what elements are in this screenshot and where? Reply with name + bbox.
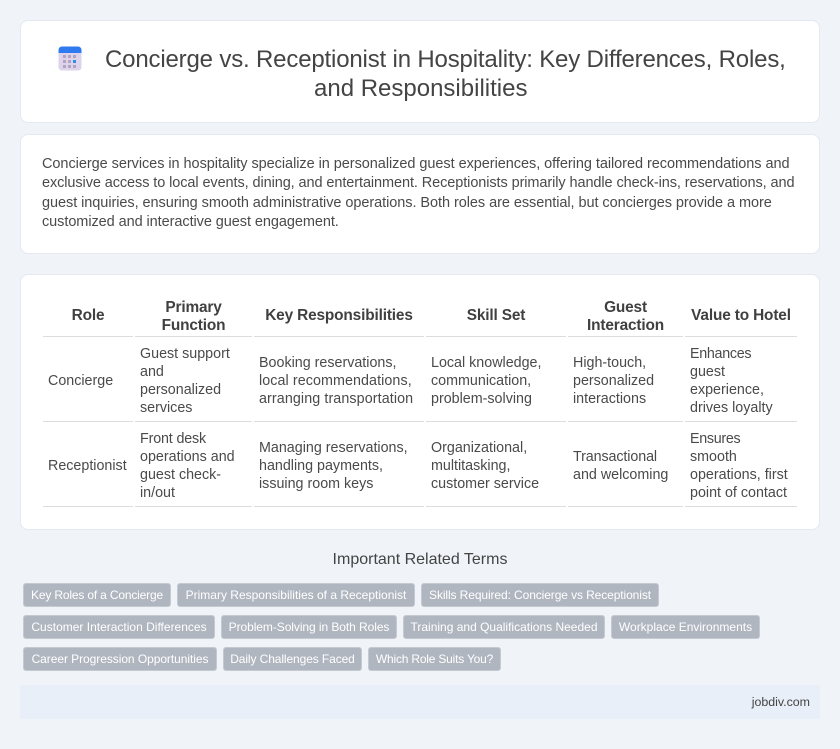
- panel: comparison table: [20, 274, 820, 530]
- table header: Primary Function: [162, 299, 225, 334]
- table header: Guest Interaction: Interaction: [587, 317, 664, 334]
- tag: Primary Responsibilities of a Receptionist: Primary Responsibilities of a Receptionist: [186, 588, 406, 602]
- row: Receptionist responsibilities: [259, 440, 408, 492]
- row: Concierge role: Concierge: [48, 373, 113, 389]
- row: Receptionist skills: Organizational,: [431, 440, 527, 456]
- row: Concierge primary function: and: [140, 364, 164, 380]
- row: Receptionist value: point of contact: [690, 485, 787, 501]
- row: Receptionist role: Receptionist: [48, 458, 127, 474]
- row: Concierge value: experience,: [690, 382, 764, 398]
- row: Receptionist skills: multitasking,: [431, 458, 510, 474]
- row: Receptionist primary function: operations and: [140, 449, 235, 465]
- row: Receptionist primary function: in/out: [140, 485, 175, 501]
- tag: Daily Challenges Faced: Daily Challenges Faced: [230, 652, 355, 666]
- tag: Daily Challenges Faced: [223, 647, 362, 671]
- row: Receptionist value: [690, 431, 788, 501]
- row: Receptionist primary function: [140, 431, 235, 501]
- row: Concierge skills: Local knowledge,: [431, 355, 541, 371]
- tag: Which Role Suits You?: Which Role Suits You?: [376, 652, 493, 666]
- footer credit: jobdiv.com: [752, 695, 810, 709]
- icon: calendar: [58, 46, 82, 70]
- row: Concierge primary function: personalized: [140, 382, 221, 398]
- tag: Problem-Solving in Both Roles: Problem-Solving in Both Roles: [229, 620, 389, 634]
- row: Receptionist skills: customer service: [431, 476, 539, 492]
- row: Concierge guest interaction: High-touch,: [573, 355, 646, 371]
- table header: Skill Set: Skill Set: [467, 307, 525, 324]
- tag: Skills Required: [421, 583, 659, 607]
- row: Concierge primary function: services: [140, 400, 192, 416]
- row: Concierge responsibilities: local recommendations,: [259, 373, 412, 389]
- row: Receptionist value: smooth: [690, 449, 737, 465]
- row: Receptionist skills: [431, 440, 539, 492]
- row: Concierge value: drives loyalty: [690, 400, 773, 416]
- row: Concierge guest interaction: personalized: [573, 373, 654, 389]
- row: Concierge primary function: Guest support: [140, 346, 230, 362]
- row: Receptionist guest interaction: and welcoming: [573, 467, 668, 483]
- header card: [20, 20, 820, 123]
- tag: Workplace Environments: [611, 615, 760, 639]
- row: Receptionist guest interaction: Transactional: [573, 449, 657, 465]
- tag: Primary Responsibilities of a Receptionist: [177, 583, 415, 607]
- row: Receptionist primary function: guest check-: [140, 467, 221, 483]
- tag: Which Role Suits You?: [368, 647, 501, 671]
- tag: Customer Interaction Differences: [23, 615, 215, 639]
- row: Concierge responsibilities: [259, 355, 413, 407]
- title: Concierge vs. Receptionist in Hospitality: Key Differences, Roles,: [105, 46, 786, 73]
- intro text: customized and interactive guest engagement.: [42, 214, 339, 230]
- row: Receptionist responsibilities: Managing reservations,: [259, 440, 408, 456]
- row: Concierge value: Enhances: [690, 346, 751, 362]
- tag: Skills Required: Skills Required: Concierge vs Receptionist: [429, 588, 651, 602]
- tag: Career Progression Opportunities: [23, 647, 217, 671]
- intro text: [42, 156, 794, 230]
- row: Receptionist guest interaction: [573, 449, 668, 483]
- row: Concierge skills: problem-solving: [431, 391, 532, 407]
- row: Concierge responsibilities: arranging transportation: [259, 391, 413, 407]
- row: Concierge skills: communication,: [431, 373, 531, 389]
- tag: Workplace Environments: Workplace Environments: [619, 620, 752, 634]
- row: Concierge primary function: [140, 346, 230, 416]
- table header: Guest Interaction: Guest: [604, 299, 647, 316]
- tag: Customer Interaction Differences: Customer Interaction Differences: [31, 620, 207, 634]
- row: Concierge value: [690, 346, 773, 416]
- table header: Key Responsibilities: Key Responsibilities: [265, 307, 413, 324]
- footer bar: [20, 685, 820, 719]
- tag: Training and Qualifications Needed: [403, 615, 605, 639]
- tag: Key Roles of a Concierge: [23, 583, 171, 607]
- row: Receptionist value: Ensures: [690, 431, 740, 447]
- title: and Responsibilities: [314, 75, 527, 102]
- table header: Role: Role: [72, 307, 104, 324]
- related terms heading: Important Related Terms: [333, 551, 507, 568]
- title: [105, 46, 786, 102]
- intro text: exclusive access to local events, dining, and entertainment. Receptionists primarily handle check-ins, reservations, and: [42, 175, 794, 191]
- row: Concierge value: guest: [690, 364, 725, 380]
- row: Receptionist responsibilities: issuing room keys: [259, 476, 373, 492]
- intro text: guest inquiries, ensuring smooth administrative operations. Both roles are essential, but concierges provide a more: [42, 195, 772, 211]
- row: Concierge guest interaction: interactions: [573, 391, 646, 407]
- row: Receptionist value: operations, first: [690, 467, 788, 483]
- row: Concierge guest interaction: [573, 355, 654, 407]
- tag: Career Progression Opportunities: Career Progression Opportunities: [32, 652, 208, 666]
- intro text: Concierge services in hospitality specialize in personalized guest experiences, offering tailored recommendations and: [42, 156, 790, 172]
- tag: Key Roles of a Concierge: Key Roles of a Concierge: [31, 588, 163, 602]
- table header: Guest Interaction: [587, 299, 664, 334]
- tag: Training and Qualifications Needed: Training and Qualifications Needed: [410, 620, 598, 634]
- tag: Problem-Solving in Both Roles: [221, 615, 397, 639]
- row: Receptionist responsibilities: handling payments,: [259, 458, 383, 474]
- table header: Primary Function: Primary: [165, 299, 222, 316]
- table header: Primary Function: Function: [162, 317, 225, 334]
- row: Concierge responsibilities: Booking reservations,: [259, 355, 396, 371]
- row: Concierge skills: [431, 355, 541, 407]
- row: Receptionist primary function: Front desk: [140, 431, 206, 447]
- panel: introduction: [20, 134, 820, 254]
- table header: Value to Hotel: Value to Hotel: [691, 307, 791, 324]
